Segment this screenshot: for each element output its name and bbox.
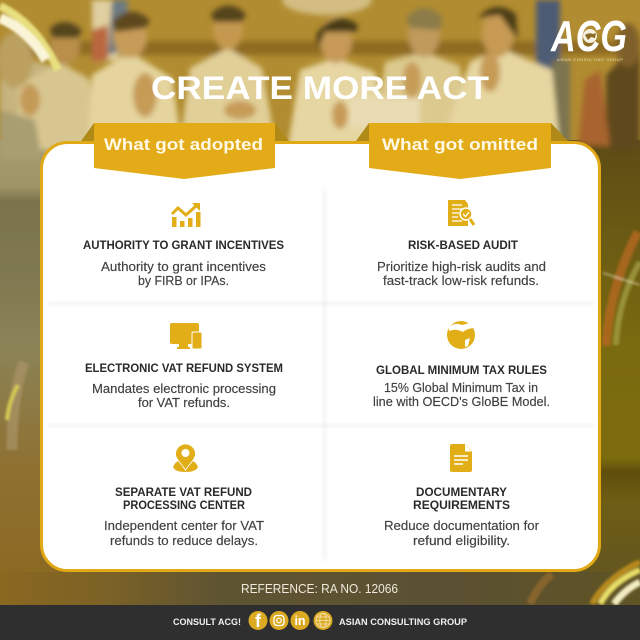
title: CREATE MORE ACT — [151, 70, 489, 106]
cell: documentary requirements: Reduce documentation for — [384, 519, 539, 533]
footer bar: CONSULT ACG! — [173, 617, 241, 628]
cell: authority to grant incentives: by FIRB or IPAs. — [138, 274, 229, 288]
cell: separate VAT refund processing center: refunds to reduce delays. — [110, 534, 258, 548]
cell: global minimum tax rules: 15% Global Minimum Tax in — [384, 381, 538, 395]
ribbon: what got adopted — [81, 123, 289, 179]
cell: documentary requirements: REQUIREMENTS — [413, 500, 510, 512]
cell: separate VAT refund processing center: SEPARATE VAT REFUND — [115, 487, 252, 499]
icon: instagram — [270, 611, 288, 630]
cell: electronic VAT refund system: Mandates electronic processing — [92, 382, 276, 396]
icon: facebook — [248, 611, 268, 631]
footer bar: ASIAN CONSULTING GROUP — [339, 617, 468, 628]
icon: map pin — [173, 444, 198, 472]
cell: electronic VAT refund system — [85, 323, 283, 410]
cell: documentary requirements: refund eligibility. — [413, 534, 510, 548]
icon: website globe — [314, 611, 332, 630]
cell: separate VAT refund processing center: PROCESSING CENTER — [123, 500, 246, 512]
logo: Asian Consulting Group: ASIAN CONSULTING GROUP — [557, 57, 623, 62]
ribbon: what got adopted: What got adopted — [104, 135, 263, 154]
icon: document — [450, 444, 472, 472]
cell: risk-based audit: RISK-BASED AUDIT — [408, 240, 518, 252]
cell: global minimum tax rules: GLOBAL MINIMUM TAX RULES — [376, 365, 547, 377]
cell: separate VAT refund processing center — [104, 444, 264, 548]
cell: authority to grant incentives: Authority to grant incentives — [101, 260, 266, 274]
cell: authority to grant incentives: AUTHORITY TO GRANT INCENTIVES — [83, 240, 284, 252]
ribbon: what got omitted — [356, 123, 568, 179]
icon: linkedin — [290, 611, 310, 630]
icon: facebook: f — [255, 611, 262, 631]
white content panel — [42, 142, 600, 570]
cell: risk-based audit — [377, 200, 546, 288]
cell: risk-based audit: Prioritize high-risk audits and — [377, 260, 546, 274]
icon: globe — [447, 321, 475, 349]
ribbon: what got omitted: What got omitted — [382, 135, 538, 154]
cell: electronic VAT refund system: for VAT refunds. — [138, 396, 230, 410]
cell: documentary requirements — [384, 444, 539, 548]
footer bar — [0, 605, 640, 640]
icon: monitor and phone — [170, 323, 202, 349]
cell: electronic VAT refund system: ELECTRONIC VAT REFUND SYSTEM — [85, 363, 283, 375]
cell: separate VAT refund processing center: Independent center for VAT — [104, 519, 264, 533]
cell: authority to grant incentives — [83, 203, 284, 288]
cell: global minimum tax rules — [373, 321, 550, 409]
icon: linkedin: in — [294, 614, 306, 628]
cell: global minimum tax rules: line with OECD's GloBE Model. — [373, 395, 550, 409]
icon: growth chart — [172, 203, 200, 227]
icon: audit document with magnifier — [448, 200, 474, 226]
cell: documentary requirements: DOCUMENTARY — [416, 487, 507, 499]
reference line: REFERENCE: RA NO. 12066 — [241, 582, 398, 596]
cell: risk-based audit: fast-track low-risk refunds. — [383, 274, 539, 288]
